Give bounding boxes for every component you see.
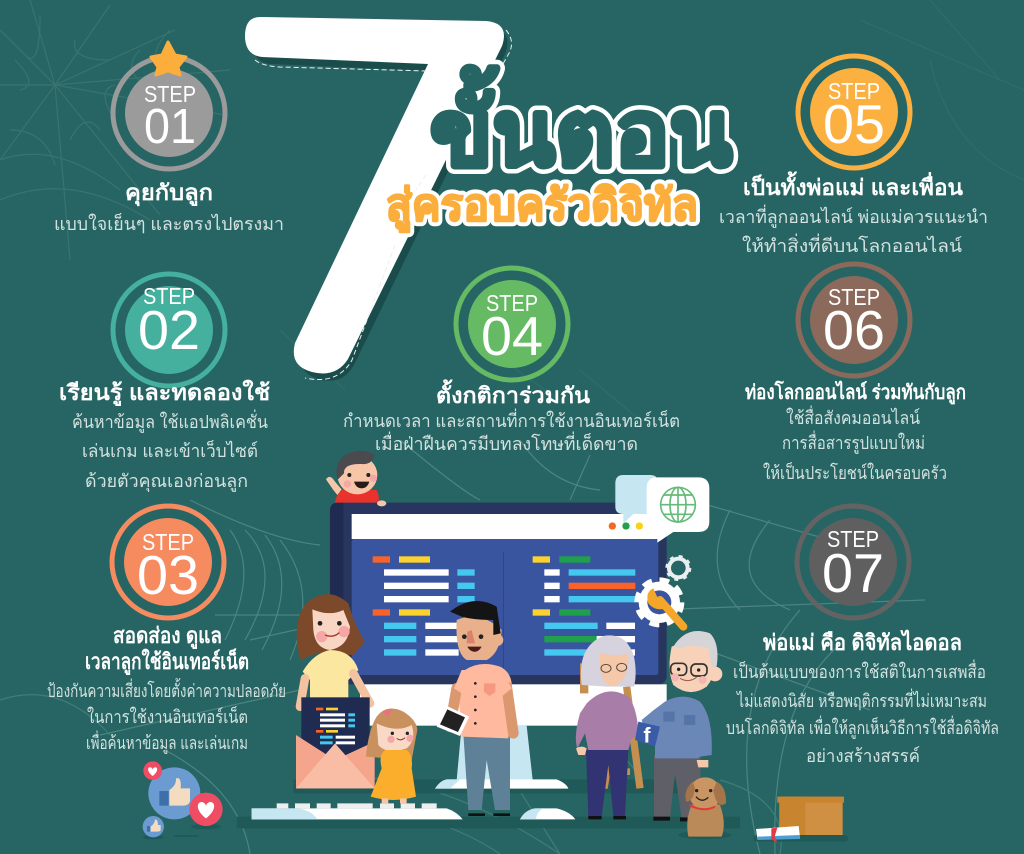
title: ขั้นตอน: ขั้นตอน [430,66,732,185]
step 02 text: เรียนรู้ และทดลองใช้ [59,379,270,407]
keyboard and mouse [252,803,575,819]
grandfather with facebook card [635,631,722,821]
step 07 text: พ่อแม่ คือ ดิจิทัลไอดอล [763,629,962,655]
step 02 badge [113,274,225,386]
step 03 text [47,623,286,754]
step 05 text: เวลาที่ลูกออนไลน์ พ่อแม่ควรแนะนำ [719,204,988,228]
step 06 badge: STEP [828,284,880,310]
step 06 text: การสื่อสารรูปแบบใหม่ [782,430,925,454]
daughter in yellow dress [366,708,417,803]
step 06 badge [798,264,910,376]
subtitle: สู่ครอบครัวดิจิทัล: สู่ครอบครัวดิจิทัล [386,181,698,232]
step 05 text: เป็นทั้งพ่อแม่ และเพื่อน [743,171,963,200]
step 03 badge: STEP [142,529,194,555]
step 02 text: เล่นเกม และเข้าเว็บไซต์ [82,439,258,461]
monitor chin and stand [360,684,667,789]
step 01 text [54,180,284,234]
step 01 badge [113,57,225,169]
step 01 text: คุยกับลูก [125,180,213,207]
step 05 badge: 05 [823,93,885,155]
step 07 badge: 07 [822,542,884,604]
step 03 badge [112,506,224,618]
step 04 badge [456,268,568,380]
kid peeking over monitor [326,451,386,506]
step 06 badge: 06 [823,299,885,361]
step 02 badge: STEP [143,283,195,309]
icon: like and hearts cluster [143,761,223,839]
step 01 text: แบบใจเย็นๆ และตรงไปตรงมา [54,212,284,234]
step 01 badge: STEP [144,81,196,107]
father with tablet [437,601,513,816]
step 02 badge: 02 [138,299,200,361]
step 06 text: ใช้สื่อสังคมออนไลน์ [786,405,920,428]
icon: star [151,42,186,75]
step 07 text: อย่างสร้างสรรค์ [806,746,920,766]
step 07 text [726,629,999,766]
dog [678,777,732,839]
computer monitor [330,503,667,684]
step 04 badge: STEP [486,290,538,316]
step 01 badge: 01 [144,100,196,154]
box and diploma [753,797,848,843]
step 05 badge: STEP [828,78,880,104]
step 05 badge [798,56,910,168]
mother with envelope [296,594,375,788]
step 04 text: ตั้งกติการ่วมกัน [436,379,590,408]
step 04 text [343,379,680,454]
title numeral 7 [245,17,512,381]
grandmother [576,635,638,819]
step 03 text: สอดส่อง ดูแล [113,623,222,650]
step 07 badge: STEP [827,526,879,552]
grandfather with facebook card: f [643,724,651,748]
step 02 text: ด้วยตัวคุณเองก่อนลูก [85,471,248,492]
step 07 badge [797,506,909,618]
subtitle: สู่ครอบครัวดิจิทัล: สู่ครอบครัวดิจิทัล [386,181,698,232]
step 04 text: กำหนดเวลา และสถานที่การใช้งานอินเทอร์เน็ต [343,408,680,431]
step 04 text: เมื่อฝ่าฝืนควรมีบทลงโทษที่เด็ดขาด [375,431,638,454]
step 02 text [59,379,270,492]
step 07 text: เป็นต้นแบบของการใช้สติในการเสพสื่อ [733,659,986,682]
step 02 text: ค้นหาข้อมูล ใช้แอปพลิเคชั่น [72,409,268,433]
step 06 text: ให้เป็นประโยชน์ในครอบครัว [763,461,947,483]
step 06 text [745,380,966,483]
title: ขั้นตอน: ขั้นตอน [430,66,732,185]
icon: speech bubbles with globe [615,475,709,543]
step 03 text: ป้องกันความเสี่ยงโดยตั้งค่าความปลอดภัย [47,678,286,701]
step 03 text: เพื่อค้นหาข้อมูล และเล่นเกม [86,730,248,754]
easel behind grandmother [580,663,640,788]
step 03 badge: 03 [137,544,199,606]
step 05 text: ให้ทำสิ่งที่ดีบนโลกออนไลน์ [742,233,962,256]
icon: gears and wrench [637,556,690,627]
step 03 text: ในการใช้งานอินเทอร์เน็ต [87,705,248,727]
step 06 text: ท่องโลกออนไลน์ ร่วมทันกับลูก [745,380,966,406]
step 03 text: เวลาลูกใช้อินเทอร์เน็ต [85,647,249,676]
illustration: family and computer [237,451,740,839]
step 05 text [719,171,988,256]
step 04 badge: 04 [481,305,543,367]
